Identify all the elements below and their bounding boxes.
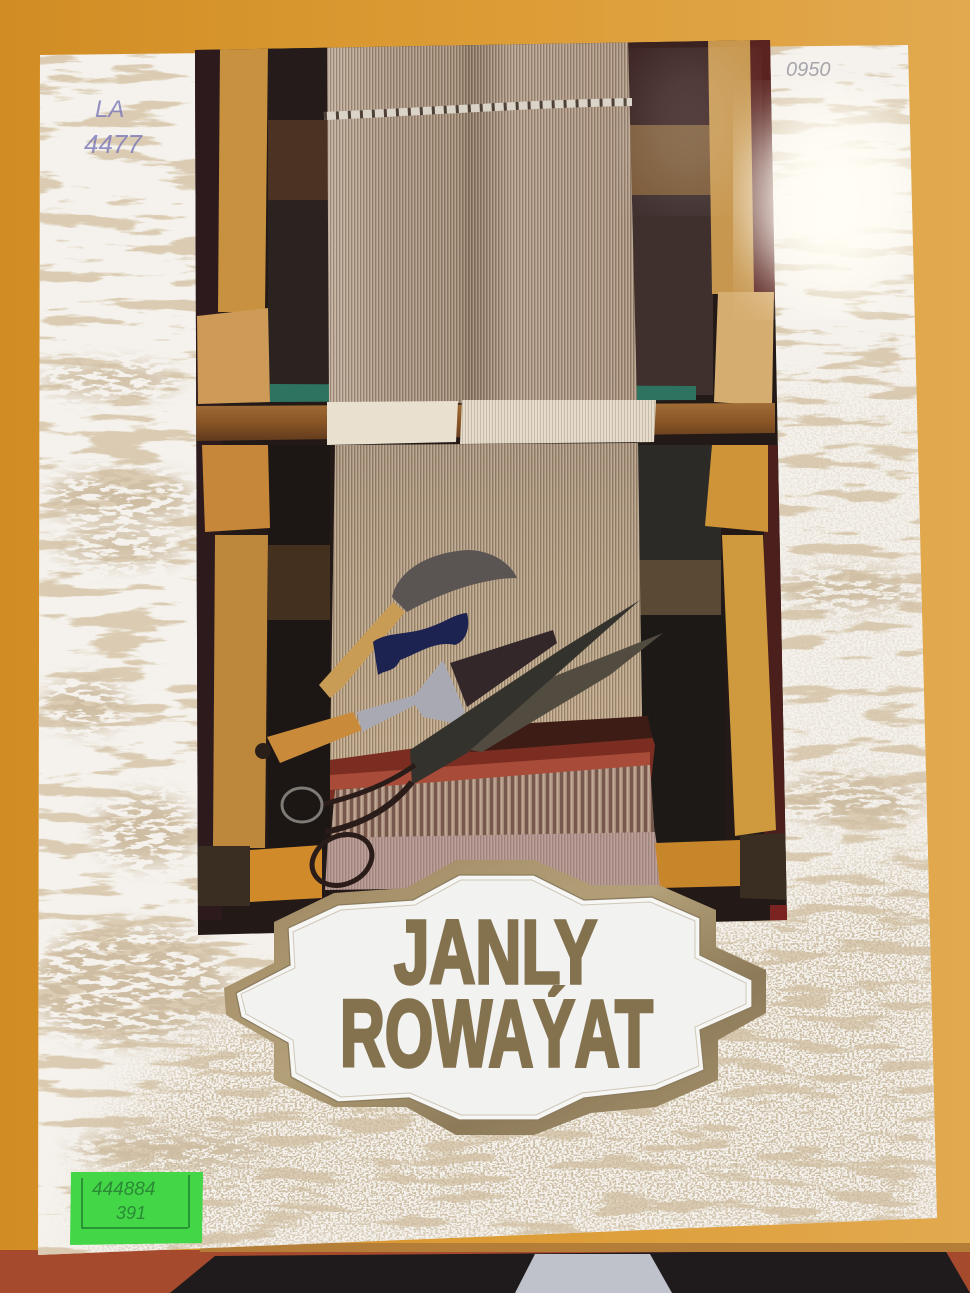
lower warp threads	[330, 443, 642, 760]
green library sticker: 444884	[92, 1179, 155, 1200]
bottom loom bars	[198, 833, 790, 921]
title plaque	[224, 860, 766, 1135]
sickle tool	[319, 550, 517, 698]
faint pencil note top right: 0950	[786, 59, 830, 81]
twisted cord	[324, 102, 632, 116]
title line one: JANLY	[394, 903, 597, 1003]
glare on plastic cover	[630, 40, 920, 300]
green library sticker	[70, 1172, 203, 1245]
wooden cross beam	[195, 403, 775, 441]
plaque inner keyline	[241, 880, 746, 1115]
plaque white panel	[236, 875, 752, 1120]
crisp gold patches	[38, 352, 927, 1180]
white yarn bindings	[327, 400, 656, 445]
handwritten blue library mark: LA	[95, 96, 124, 123]
woven carpet section	[325, 716, 662, 890]
upper warp threads	[327, 40, 637, 404]
handwritten blue library mark: 4477	[84, 129, 143, 159]
green rod	[270, 384, 696, 402]
dense dithered lower region	[64, 372, 937, 1252]
plaque gold frame	[224, 860, 766, 1135]
scissors	[282, 600, 663, 895]
weaving comb	[255, 630, 557, 763]
left loom post	[197, 46, 270, 848]
floor and dark objects below the table	[0, 1243, 970, 1293]
title line two: ROWAÝAT	[340, 981, 653, 1087]
green library sticker: 391	[116, 1203, 146, 1223]
handwritten blue library mark	[84, 96, 143, 159]
dark loom backdrop	[190, 40, 789, 920]
right loom post	[705, 40, 776, 836]
cover photograph of a carpet loom	[190, 35, 790, 940]
blue yarn bundle	[373, 613, 468, 675]
